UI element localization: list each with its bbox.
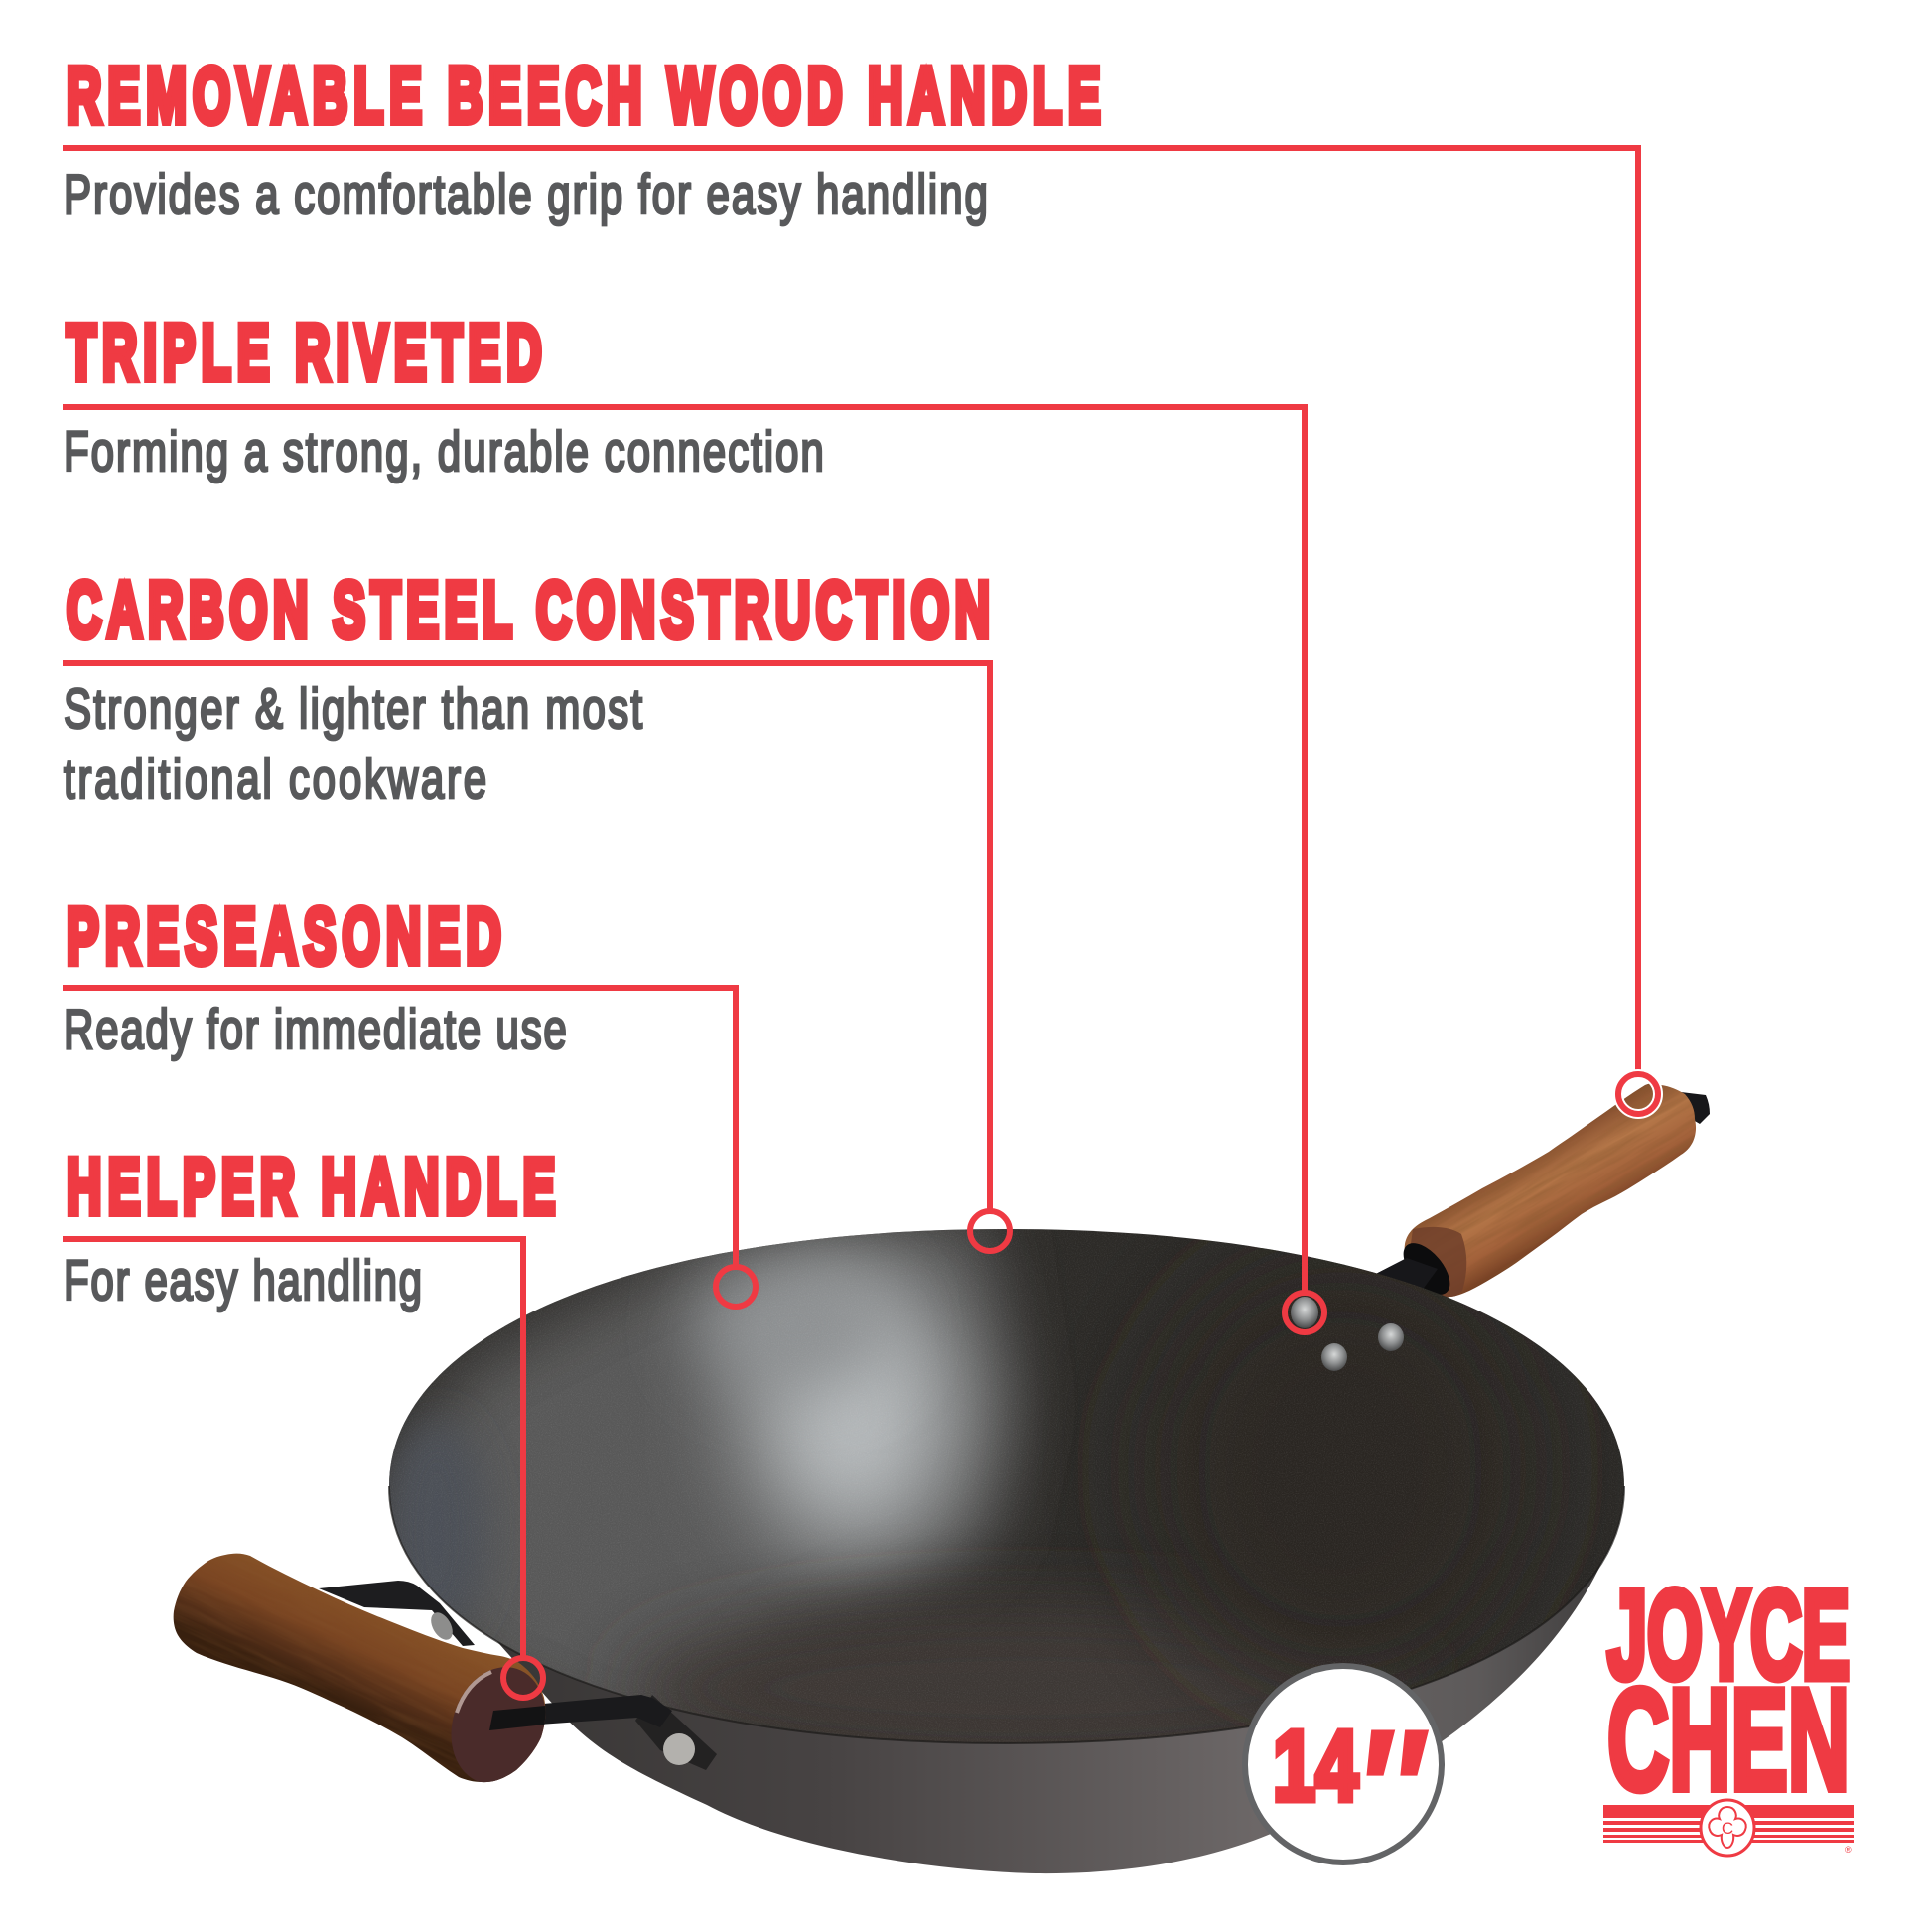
heading: CARBON STEEL CONSTRUCTION [67, 566, 990, 653]
description: Forming a strong, durable connection [64, 420, 824, 483]
stripes [1603, 1805, 1854, 1843]
marker [716, 1267, 756, 1307]
feature: carbon steel construction: traditional cookware [64, 748, 486, 811]
leader line [63, 148, 1638, 1073]
wok rim edge [389, 1486, 1624, 1743]
size badge: 14 inch [1245, 1666, 1442, 1884]
leader line [63, 1239, 523, 1657]
heading: TRIPLE RIVETED [67, 309, 542, 396]
back helper bracket [319, 1581, 475, 1646]
logo: Joyce Chen [1603, 1565, 1854, 1856]
short helper wood handle [173, 1553, 546, 1783]
rivets [1291, 1297, 1404, 1371]
feature: triple riveted [63, 309, 1324, 1332]
emblem: C [1722, 1819, 1733, 1838]
marker [970, 1211, 1010, 1251]
feature: removable beech wood handle [63, 52, 1658, 1114]
marker [1618, 1074, 1658, 1114]
description: Provides a comfortable grip for easy handling [64, 163, 988, 226]
feature: preseasoned [63, 893, 756, 1307]
heading: REMOVABLE BEECH WOOD HANDLE [67, 52, 1101, 139]
description: Stronger & lighter than most [64, 677, 642, 741]
heading: PRESEASONED [67, 893, 501, 980]
front helper bracket [489, 1695, 717, 1770]
wok illustration [173, 1069, 1710, 1874]
wok interior [377, 1216, 1638, 1772]
heading: HELPER HANDLE [67, 1143, 555, 1230]
long handle collar [1368, 1235, 1458, 1303]
emblem [1701, 1800, 1754, 1856]
leader line [63, 407, 1305, 1292]
marker [1285, 1293, 1324, 1332]
marker [503, 1658, 543, 1698]
leader line [63, 988, 736, 1266]
long beech wood handle [1404, 1084, 1696, 1297]
leader line [63, 663, 990, 1210]
size badge: 14 inch: ″ [1362, 1696, 1430, 1884]
long handle steel shaft [1368, 1092, 1710, 1296]
description: For easy handling [64, 1249, 422, 1312]
wok outer body [397, 1494, 1624, 1873]
registered mark: ® [1845, 1845, 1852, 1855]
feature: carbon steel construction [63, 566, 1010, 1251]
size badge: 14 inch: 14 [1273, 1711, 1358, 1822]
feature: helper handle [63, 1143, 555, 1698]
description: Ready for immediate use [64, 998, 567, 1061]
